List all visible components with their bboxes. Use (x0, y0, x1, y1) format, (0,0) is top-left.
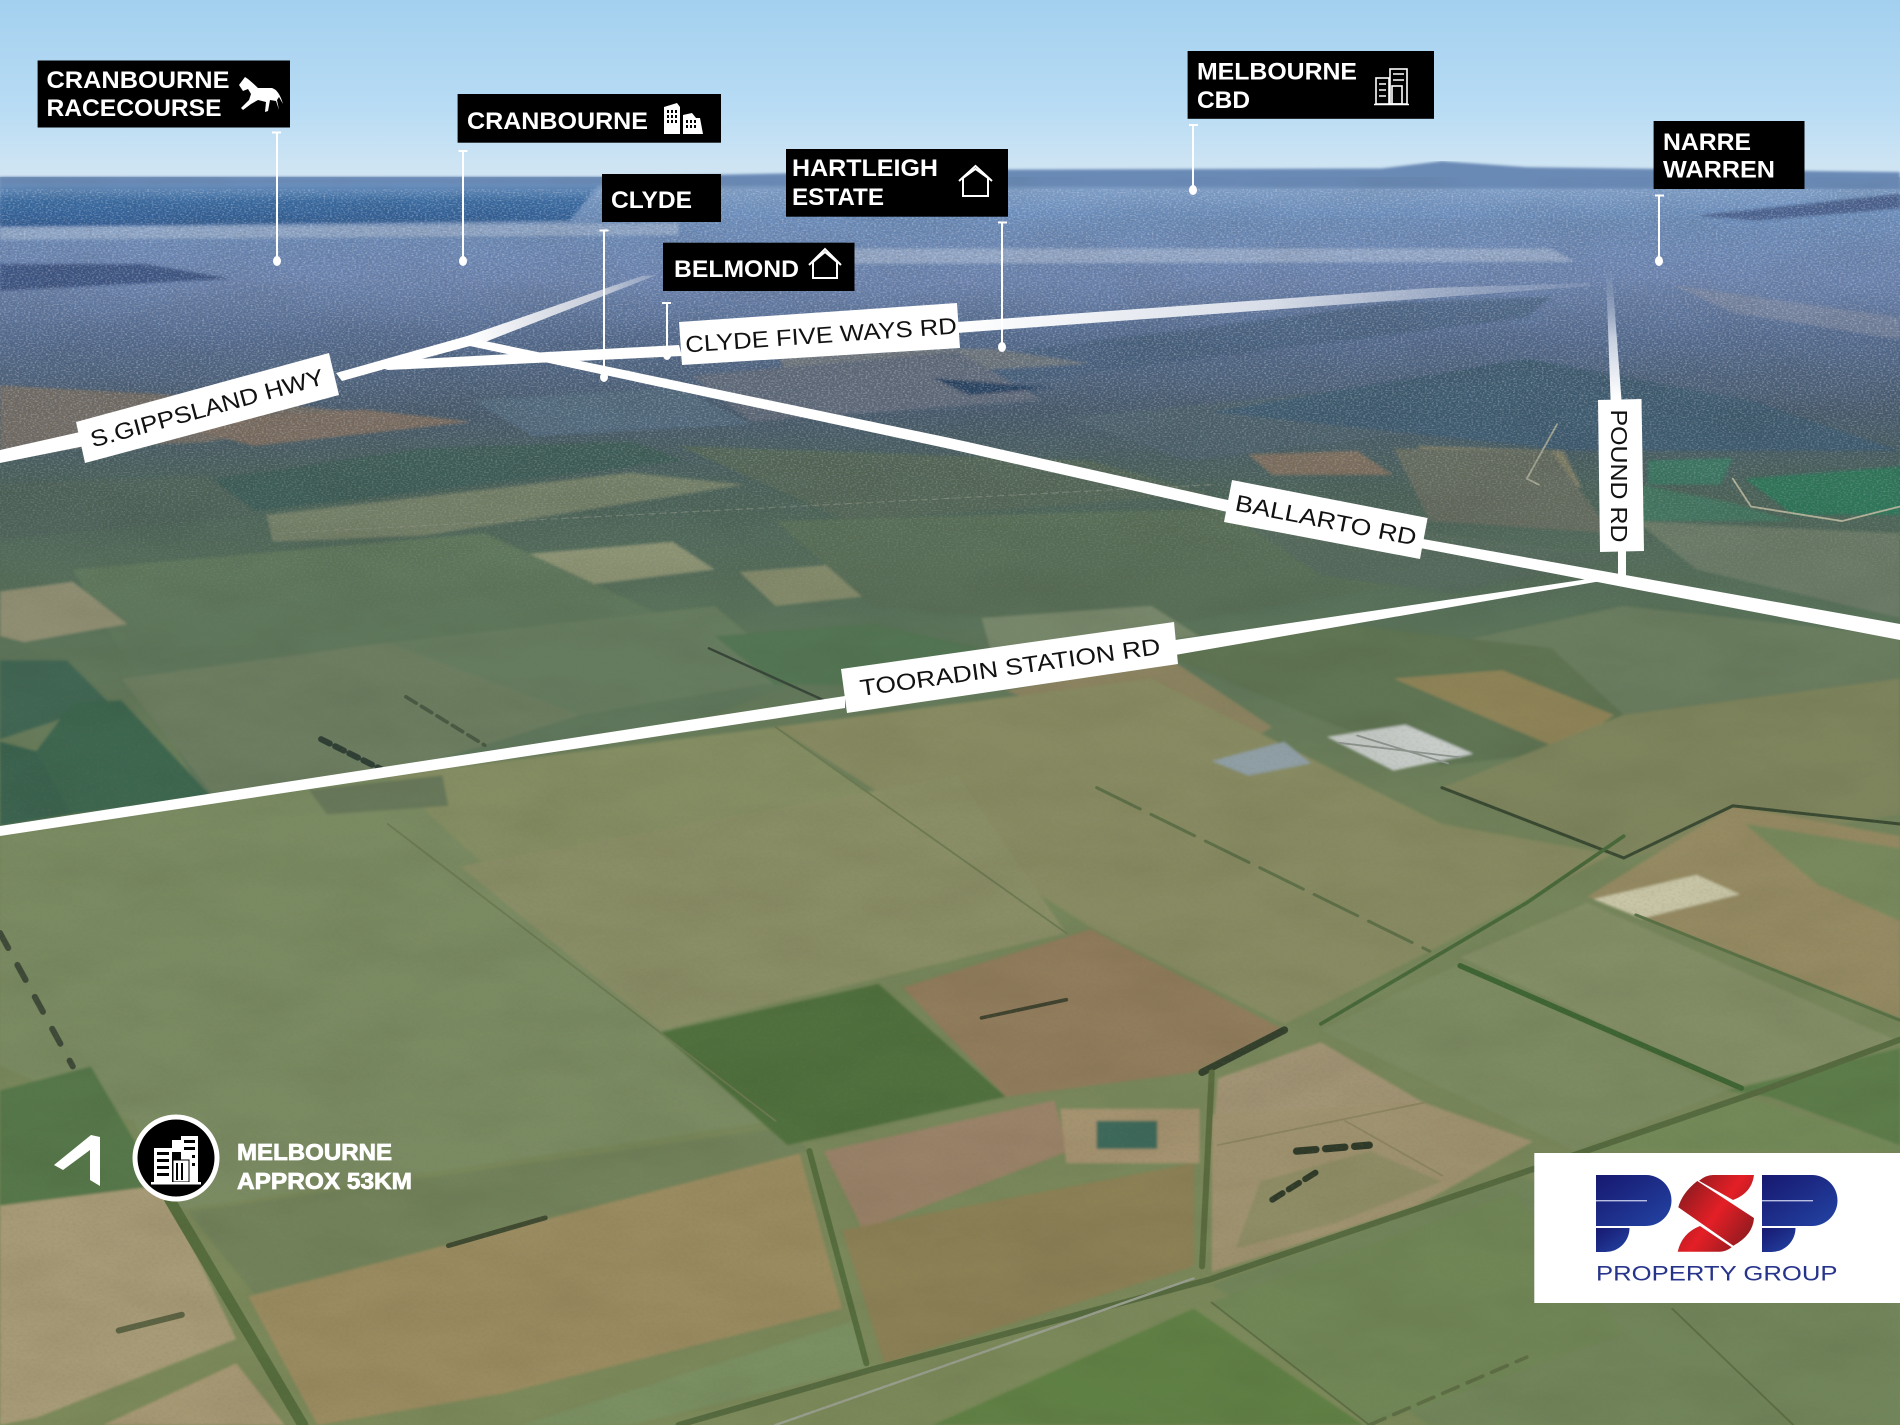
marker line: Narre Warren (1655, 194, 1664, 266)
location: Cranbourne Racecourse: CRANBOURNE (46, 67, 230, 94)
location: Melbourne CBD: CBD (1197, 87, 1250, 114)
distance text: APPROX 53KM (237, 1168, 412, 1194)
location: Melbourne CBD: MELBOURNE (1197, 58, 1357, 86)
icon: buildings (664, 103, 703, 134)
marker line: Cranbourne Racecourse (272, 132, 281, 266)
road label: Ballarto Rd (1224, 480, 1428, 559)
icon: house (809, 249, 841, 278)
road: Clyde Five Ways Rd (382, 283, 1590, 370)
marker line: Belmond (662, 302, 671, 360)
logo mark: P (1596, 1175, 1672, 1252)
road label: S.Gippsland Hwy (76, 353, 339, 463)
logo: PSP Property Group (1534, 1153, 1900, 1303)
location: Cranbourne Racecourse: RACECOURSE (46, 95, 222, 122)
road label: Pound Rd (1598, 399, 1644, 552)
location: Narre Warren: NARRE (1663, 129, 1751, 156)
location: Belmond (663, 243, 854, 291)
road: Pound Rd (1606, 273, 1626, 579)
icon: city buildings (1374, 69, 1409, 104)
distance text: MELBOURNE (237, 1139, 392, 1165)
sky (0, 0, 1900, 180)
icon: house (959, 166, 992, 196)
location: Belmond: BELMOND (674, 256, 799, 283)
location: Hartleigh Estate (786, 149, 1008, 217)
road label: Clyde Five Ways Rd: CLYDE FIVE WAYS RD (684, 313, 958, 357)
marker line: Melbourne CBD (1189, 124, 1198, 195)
location: Melbourne CBD (1188, 51, 1434, 119)
location: Hartleigh Estate: ESTATE (792, 184, 884, 211)
road label: Tooradin Station Rd: TOORADIN STATION RD (858, 633, 1162, 701)
logo mark: S (1678, 1175, 1754, 1252)
location: Narre Warren: WARREN (1663, 156, 1775, 184)
tree lines and tracks (0, 424, 1900, 1425)
distance badge: Melbourne (135, 1117, 412, 1199)
marker line: Cranbourne (458, 150, 468, 266)
icon: north arrow (54, 1135, 100, 1186)
location: Cranbourne: CRANBOURNE (467, 108, 648, 135)
location: Cranbourne Racecourse (38, 60, 290, 128)
logo text: PROPERTY GROUP (1596, 1262, 1838, 1286)
icon: horse (239, 77, 283, 112)
location: Clyde: CLYDE (611, 187, 692, 214)
marker line: Hartleigh Estate (998, 222, 1007, 352)
road: Tooradin Station Rd (0, 578, 1607, 836)
logo mark: second P (1762, 1175, 1838, 1252)
location: Cranbourne (458, 94, 721, 143)
road label: Ballarto Rd: BALLARTO RD (1233, 490, 1419, 550)
location: Clyde (602, 174, 721, 222)
icon: Melbourne city circle (135, 1117, 217, 1199)
marker line: Clyde (600, 230, 608, 382)
road label: Tooradin Station Rd (841, 622, 1178, 713)
distance text (237, 1139, 412, 1194)
location: Narre Warren (1654, 121, 1804, 189)
road: Ballarto Rd (465, 340, 1900, 640)
road label: S.Gippsland Hwy: S.GIPPSLAND HWY (87, 364, 327, 452)
location: Hartleigh Estate: HARTLEIGH (792, 155, 938, 182)
road label: Pound Rd: POUND RD (1606, 410, 1632, 542)
road: South Gippsland Highway (0, 432, 85, 463)
road label: Clyde Five Ways Rd (679, 303, 960, 365)
